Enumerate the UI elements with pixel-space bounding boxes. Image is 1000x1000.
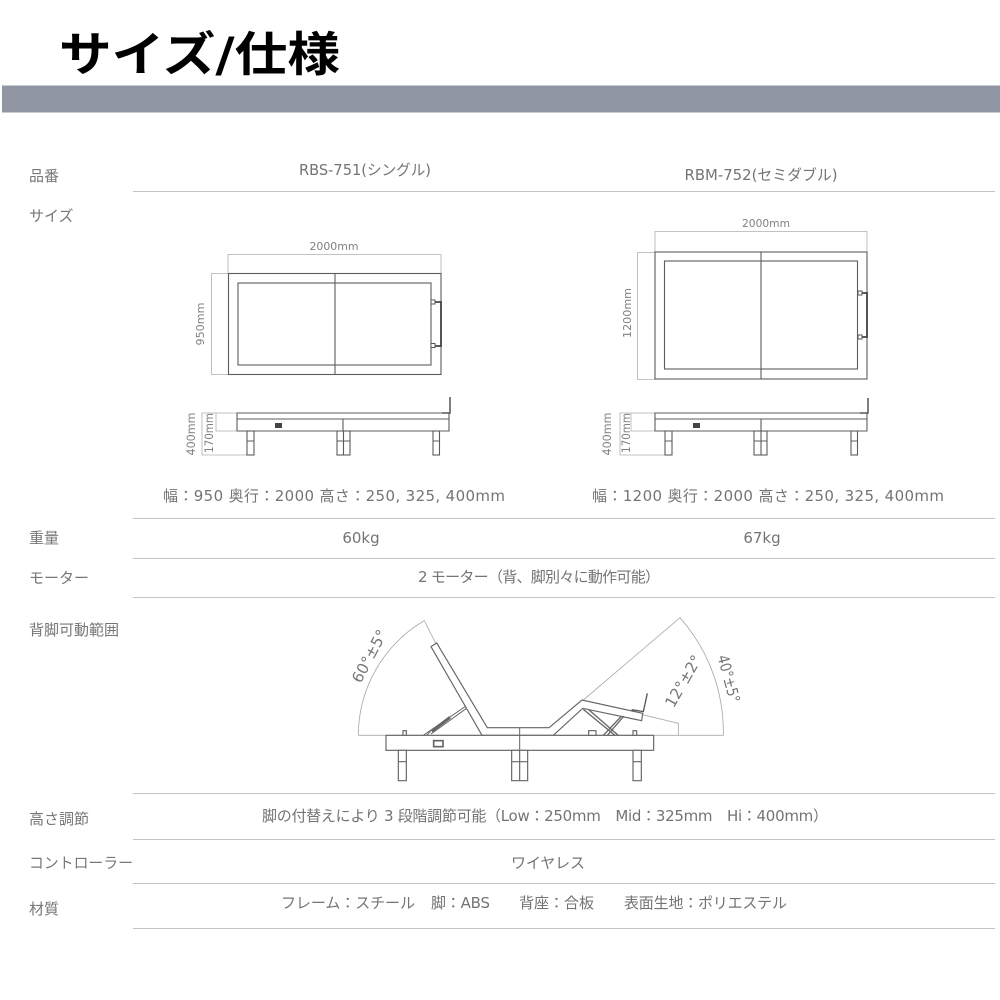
motor value: 2 モーター（背、脚別々に動作可能） [418, 568, 660, 586]
base [386, 735, 654, 750]
drawing: single top view [195, 241, 441, 374]
row labels: 材質 [29, 900, 59, 918]
drawing: single side view [184, 397, 450, 456]
raised back section [431, 643, 643, 735]
motion range diagram: 12°±2° [662, 652, 706, 711]
dimensions text [163, 487, 944, 505]
row labels: コントローラー [29, 854, 133, 872]
controller value: ワイヤレス [511, 854, 585, 872]
motion range diagram: 40°±5° [713, 653, 743, 705]
materials value: 表面生地：ポリエステル [624, 894, 787, 912]
materials value [281, 894, 787, 912]
dimensions text: 幅：950 奥行：2000 高さ：250, 325, 400mm [163, 487, 505, 505]
row labels: サイズ [29, 207, 74, 225]
weight values: 60kg [342, 529, 380, 547]
back arc [358, 621, 482, 735]
weight values [342, 529, 781, 547]
dimensions text: 幅：1200 奥行：2000 高さ：250, 325, 400mm [592, 487, 944, 505]
legs [398, 750, 641, 781]
drawing: semi-double side view [600, 398, 868, 456]
drawing: single side view: 170mm [202, 413, 216, 453]
header band [2, 86, 1000, 112]
materials value: 脚：ABS [431, 894, 490, 912]
height adjust value: 脚の付替えにより 3 段階調節可能（Low：250mm Mid：325mm Hi：400mm） [262, 807, 828, 825]
weight values: 67kg [743, 529, 781, 547]
drawing: semi-double top view: 1200mm [622, 288, 634, 338]
row labels: 高さ調節 [29, 810, 89, 828]
drawing: semi-double top view [622, 218, 867, 380]
model names: RBM-752(セミダブル) [684, 166, 838, 184]
table rules [133, 192, 995, 928]
headboard post [632, 693, 647, 712]
model names [299, 161, 838, 184]
drawing: semi-double side view: 400mm [600, 412, 614, 456]
row labels: モーター [29, 569, 89, 587]
drawing: semi-double side view: 170mm [619, 413, 633, 453]
drawing: single side view: 400mm [184, 412, 198, 456]
drawing: single top view: 2000mm [310, 241, 358, 253]
actuators [423, 706, 466, 735]
row labels: 背脚可動範囲 [29, 621, 119, 639]
row labels: 品番 [29, 167, 59, 185]
foot arc [583, 618, 723, 735]
materials value: フレーム：スチール [281, 894, 415, 912]
title: サイズ/仕様 [59, 28, 340, 83]
motion range diagram [348, 618, 743, 781]
drawing: single top view: 950mm [195, 302, 207, 346]
drawing: semi-double top view: 2000mm [742, 218, 790, 230]
row labels: 重量 [29, 529, 59, 547]
row labels [29, 167, 133, 918]
angle labels: 60°±5° [348, 627, 391, 686]
materials value: 背座：合板 [519, 894, 594, 912]
model names: RBS-751(シングル) [299, 161, 431, 179]
